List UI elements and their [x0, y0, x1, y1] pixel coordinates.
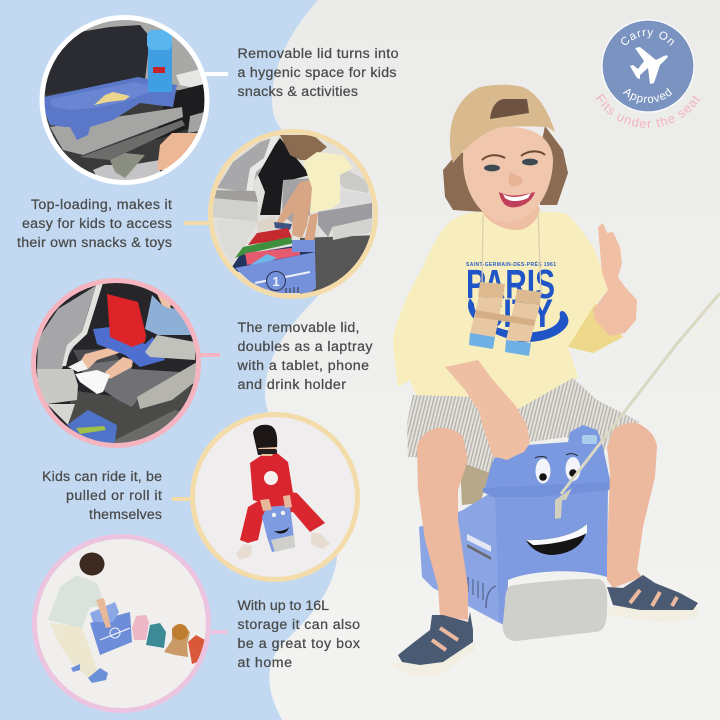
- hero shirt print: [466, 260, 568, 342]
- background: light wave panel: [265, 0, 720, 720]
- text: laptray: with a tablet, phone: [236, 358, 369, 374]
- text: removable lid: a hygenic space for kids: [238, 65, 396, 81]
- photo 5: toddler and plush toys: [32, 534, 212, 714]
- badge plane icon: [630, 47, 668, 84]
- text: toy box: With up to 16L: [238, 598, 329, 614]
- text: removable lid: Removable lid turns into: [238, 46, 399, 62]
- photo 2: child reaching into suitcase: 1: [272, 274, 280, 289]
- tray: [44, 77, 177, 140]
- photo 1: tray on airplane table: [40, 15, 210, 185]
- black clothing: [258, 138, 310, 215]
- fries: [94, 92, 130, 105]
- right sandal: [607, 575, 700, 623]
- hero hair right: [540, 126, 568, 205]
- right seat: [318, 203, 372, 237]
- photo 3: tablet laptray on seat: [31, 278, 201, 448]
- legs: [275, 180, 312, 238]
- hero shirt print: PARIS: [466, 261, 555, 307]
- text: toy box: [238, 598, 360, 671]
- text: laptray: [236, 320, 373, 393]
- suitcase roller: [503, 579, 607, 641]
- hero cap: [450, 85, 555, 163]
- suitcase lid rim: [483, 482, 610, 497]
- hero face: [463, 127, 553, 222]
- hero t-shirt: [393, 212, 623, 412]
- hero: child riding the suitcase: [387, 85, 720, 677]
- text: ride it: themselves: [89, 507, 162, 523]
- badge: carry on approved: [596, 20, 700, 128]
- connector: ride photo: [172, 497, 190, 501]
- hero binoculars: [469, 282, 541, 356]
- hands: [260, 495, 292, 511]
- right armrests: [145, 335, 195, 360]
- text: laptray: doubles as a laptray: [238, 339, 373, 355]
- left armrests: [37, 369, 78, 404]
- shoes: [257, 216, 278, 232]
- text: toy box: at home: [238, 655, 292, 671]
- head: [80, 552, 104, 576]
- text: ride it: pulled or roll it: [66, 488, 162, 504]
- floor: [300, 235, 370, 294]
- tray: [93, 327, 165, 367]
- hero shirt print: SAINT-GERMAIN-DES-PRÉS 1961: [466, 260, 556, 268]
- hero hand on suitcase: [445, 360, 530, 460]
- suitcase side details: [467, 534, 496, 608]
- text: laptray: The removable lid,: [238, 320, 360, 336]
- text: laptray: and drink holder: [238, 377, 346, 393]
- shoes: [236, 544, 252, 560]
- suitcase: [262, 505, 295, 552]
- hair: [280, 135, 327, 160]
- text: removable lid: [238, 46, 399, 100]
- girl pants: [240, 492, 325, 543]
- text: top-loading: their own snacks & toys: [17, 235, 172, 251]
- suitcase front: [495, 487, 608, 627]
- hero left leg: [417, 428, 468, 620]
- floor: [70, 386, 193, 443]
- cushion: [82, 359, 180, 407]
- pull rope: [555, 293, 720, 519]
- left sandal: [387, 612, 475, 677]
- suitcase: [419, 425, 610, 641]
- left seat: [37, 285, 97, 369]
- connector: toy box photo: [211, 630, 228, 634]
- suitcase latch: [582, 435, 597, 444]
- connector: laptray photo: [200, 353, 220, 357]
- connector: lid photo: [205, 72, 228, 76]
- suitcase: [90, 612, 132, 655]
- badge curved tagline: Fits under the seat: [596, 94, 700, 128]
- shirt: [303, 152, 353, 213]
- left seat: [217, 138, 272, 192]
- plush toys: [132, 615, 205, 664]
- legs: [80, 348, 120, 369]
- child shirt: [145, 295, 192, 335]
- hero right leg: [607, 423, 657, 588]
- shirt: [48, 575, 105, 628]
- hero binocular strings: [482, 212, 541, 295]
- bottle: [147, 30, 172, 92]
- hero eyes and smile: [482, 151, 545, 207]
- hero hair left: [443, 150, 483, 212]
- bucket: [67, 410, 117, 444]
- suitcase side: [419, 490, 507, 627]
- seat cushion back: [73, 349, 120, 364]
- text: toy box: be a great toy box: [238, 636, 360, 652]
- hero neck: [482, 198, 540, 230]
- text: top-loading: easy for kids to access: [22, 216, 172, 232]
- arm: [96, 598, 111, 628]
- connector: top-loading photo: [184, 221, 209, 225]
- text: toy box: storage it can also: [238, 617, 360, 633]
- hero raised arm and hand: [593, 223, 637, 336]
- trousers: [50, 623, 100, 678]
- photo 4: girl riding the suitcase: [190, 412, 360, 582]
- sandals: [88, 668, 108, 683]
- hero shirt print: CITY: [480, 292, 553, 336]
- tablet: [107, 294, 146, 347]
- shorts shadow under leg: [460, 462, 490, 505]
- hero shorts: [407, 378, 640, 505]
- suitcase eyes: [535, 454, 580, 484]
- sweatshirt: [250, 453, 293, 503]
- text: top-loading: [17, 197, 172, 251]
- badge top text: Carry On: [621, 30, 674, 46]
- badge bottom text: Approved: [622, 88, 672, 104]
- legs and child: [93, 160, 160, 182]
- suitcase lid: [485, 425, 610, 497]
- bag contents: [230, 245, 316, 272]
- suitcase: [235, 252, 316, 293]
- arm: [304, 213, 318, 240]
- table: [50, 107, 183, 155]
- suitcase smile: [526, 524, 587, 555]
- head: [253, 425, 277, 455]
- text: top-loading: Top-loading, makes it: [31, 197, 172, 213]
- badge disc: [602, 20, 694, 112]
- text: removable lid: snacks & activities: [238, 84, 358, 100]
- text: ride it: Kids can ride it, be: [42, 469, 162, 485]
- text: ride it: [42, 469, 162, 523]
- photo 2: child reaching into suitcase: [208, 129, 378, 299]
